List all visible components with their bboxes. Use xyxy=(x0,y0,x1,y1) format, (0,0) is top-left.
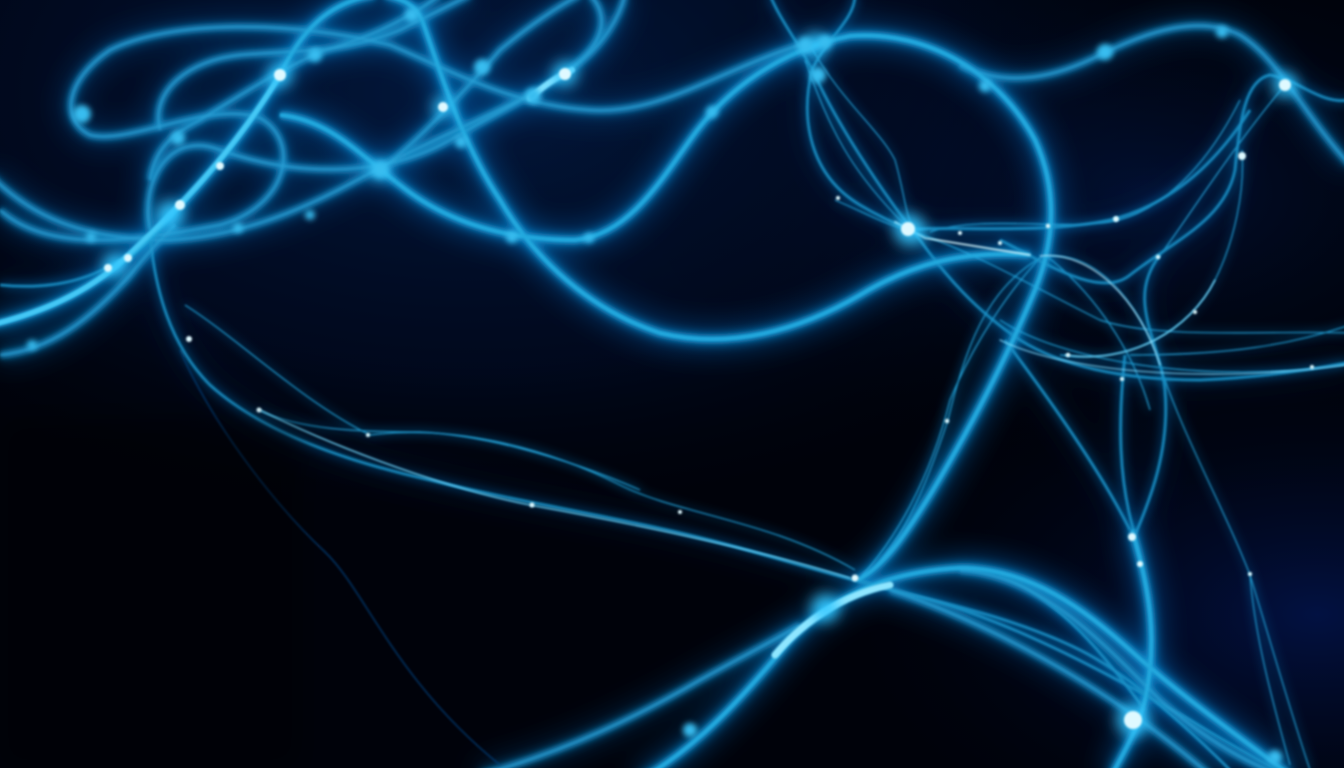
edge vignette xyxy=(0,420,300,768)
bright highlight segments xyxy=(0,70,1344,655)
glow nodes: bright cores xyxy=(104,68,1314,729)
